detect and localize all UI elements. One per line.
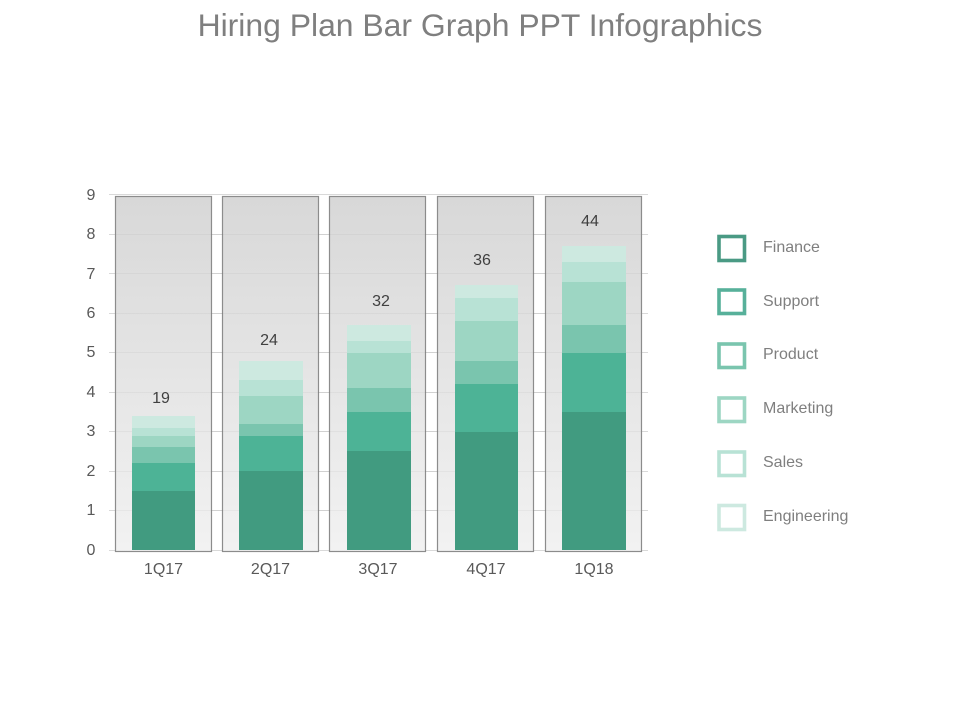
legend item: Marketing — [719, 398, 833, 422]
column: 3Q17: 32 — [372, 293, 390, 310]
x axis labels: 2Q17 — [251, 561, 290, 578]
legend item: Support: Support — [763, 293, 820, 310]
y axis labels: 4 — [87, 384, 96, 401]
y axis labels: 0 — [87, 542, 96, 559]
x axis labels — [144, 561, 614, 578]
column: 2Q17 — [239, 332, 303, 550]
column: 3Q17 — [347, 293, 411, 550]
column: 1Q17: 19 — [152, 390, 170, 407]
x axis labels: 4Q17 — [466, 561, 506, 578]
y axis labels: 7 — [87, 266, 96, 283]
grid lines — [109, 194, 648, 550]
y axis labels: 6 — [87, 305, 96, 322]
y axis labels: 3 — [87, 423, 96, 440]
legend item: Engineering — [719, 506, 848, 530]
legend item: Support — [719, 290, 820, 314]
legend item: Product: Product — [763, 346, 819, 363]
legend item: Sales — [719, 452, 803, 476]
y axis labels — [87, 187, 96, 559]
y axis labels: 2 — [87, 463, 96, 480]
column: 1Q17 — [132, 390, 195, 550]
legend item: Sales: Sales — [763, 454, 803, 471]
title: Hiring Plan Bar Graph PPT Infographics — [198, 7, 762, 43]
column: 2Q17: 24 — [260, 332, 278, 349]
x axis labels: 3Q17 — [358, 561, 398, 578]
y axis labels: 1 — [87, 502, 96, 519]
legend item: Finance — [719, 236, 820, 260]
legend — [719, 236, 848, 530]
column: 4Q17 — [455, 252, 518, 550]
column backgrounds — [116, 196, 642, 552]
y axis labels: 8 — [87, 226, 96, 243]
y axis labels: 9 — [87, 187, 96, 204]
column: 4Q17: 36 — [473, 252, 491, 269]
column: 1Q18 — [562, 213, 626, 550]
x axis labels: 1Q18 — [574, 561, 614, 578]
bar chart — [87, 187, 648, 578]
y axis labels: 5 — [87, 344, 96, 361]
legend item: Product — [719, 344, 819, 368]
legend item: Engineering: Engineering — [763, 508, 848, 525]
column: 1Q18: 44 — [581, 213, 599, 230]
legend item: Finance: Finance — [763, 239, 820, 256]
x axis labels: 1Q17 — [144, 561, 183, 578]
legend item: Marketing: Marketing — [763, 400, 833, 417]
